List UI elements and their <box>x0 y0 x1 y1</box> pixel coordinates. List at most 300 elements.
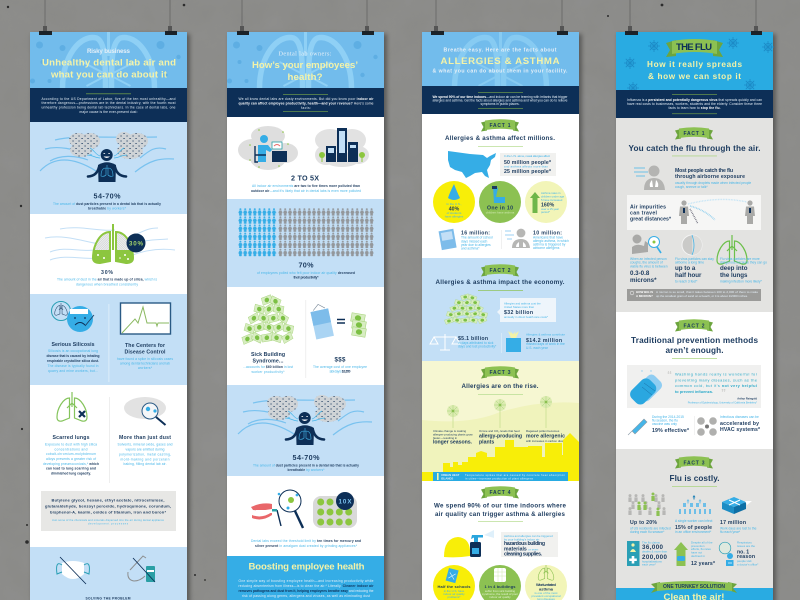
callout: how big is a micron <box>627 289 761 301</box>
stat circle: 160%: Asthma rates in <box>541 191 561 195</box>
stat circle: 160%: 160% <box>541 202 555 208</box>
stat: 16 million school days: days missed each <box>461 240 488 244</box>
panel: fact 3 flu is costly: A single worker can infect <box>675 519 712 523</box>
poster 2: employee health <box>227 26 387 600</box>
panel: fact 3 allergies on the rise: plants <box>479 440 494 446</box>
callout: $32 billion: Allergies and asthma cost the <box>504 302 541 306</box>
panel: fact 3 flu is costly: have not <box>691 550 702 554</box>
header panel <box>30 30 187 88</box>
callout: triggers: hazardous building <box>504 541 545 547</box>
panel: 30% silica lungs: 30% <box>101 270 113 276</box>
panel: fact 3 allergies on the rise: Ragweed pollen becomes <box>526 429 560 433</box>
panel: fact 3 flu is costly: deaths & more than <box>642 550 668 554</box>
header panel: How it really spreads <box>647 60 742 69</box>
stat circle: 40%: have allergies <box>445 214 464 218</box>
panel: fact 1 catch through the air <box>616 118 773 312</box>
icon: magnifier over dust cloud <box>124 397 166 425</box>
panel: fact 3 flu is costly: declined in <box>691 554 705 558</box>
icon: wind and person <box>634 166 665 190</box>
panel: fact 1 catch through the air: through airborne exposure <box>675 174 745 180</box>
binder clips <box>431 26 568 35</box>
callout: millions affected: and asthma affects more than <box>504 164 548 168</box>
stat: 10 million allergic asthma: 10 million: <box>533 230 562 236</box>
panel: fact 2 traditional prevention: aren’t enough. <box>666 346 724 355</box>
callout: $32 billion: United States more than <box>504 305 535 309</box>
callout: triggers: cleaning supplies. <box>504 552 543 558</box>
callout: air impurities travel <box>627 195 761 230</box>
icon: 10X particle cloud: 10X <box>338 498 352 506</box>
panel: scarred lungs and chemicals: cobalt-chromium-molybdenum <box>46 452 96 456</box>
callout: millions affected: 25 million people* <box>504 169 552 175</box>
icon: green lungs <box>717 235 747 264</box>
panel: serious silicosis and CDC: respirable crystalline silica dust. <box>47 359 99 363</box>
callout: triggers <box>501 532 558 558</box>
panel: scarred lungs and chemicals: Scarred lungs <box>52 435 90 441</box>
stat circle: 40% <box>433 181 475 223</box>
intro navy panel: major cause is the ever-present dust: <box>80 110 138 114</box>
callout: triggers: Asthma and allergies can be triggered <box>504 534 553 538</box>
fact 1 ribbon <box>675 127 713 140</box>
fact 2 ribbon: FACT 2 <box>684 324 705 330</box>
panel: fact 3 allergies on the rise: longer seasons. <box>433 440 473 446</box>
panel: fact 1 catch through the air: Flu virus particles are more <box>720 257 760 261</box>
panel: fact 3 flu is costly: flu each year* <box>720 530 741 534</box>
stat circle: 160% <box>525 181 567 223</box>
panel: fact 3 allergies on the rise: Ozone and CO₂ levels that feed <box>479 429 520 433</box>
intro navy panel: quality can affect employee productivity, health—and your revenue? Here’s some <box>238 102 374 106</box>
panel: one turnkey solution <box>616 581 773 600</box>
panel: scarred lungs and chemicals: More than just dust <box>119 435 171 441</box>
panel: fact 3 allergies on the rise: Climate change is making <box>433 429 466 433</box>
panel: fact 2 economy: in days attributed to sick <box>458 341 494 345</box>
binder clips <box>39 26 177 35</box>
fact 1 ribbon: FACT 1 <box>490 123 511 129</box>
icon: washing hands <box>628 370 664 407</box>
fact 2 ribbon: FACT 2 <box>490 268 511 274</box>
panel: fact 2 traditional prevention <box>616 312 773 449</box>
panel: serious silicosis and CDC <box>30 294 187 385</box>
stat: 10 million allergic asthma: asthma is triggered by <box>533 242 566 246</box>
icon: pile of money <box>444 294 488 324</box>
fact 1 ribbon: FACT 1 <box>684 131 705 137</box>
intro navy panel: allergies and asthma. Get the facts about allergies and asthma and what you can do to relieve <box>432 98 568 102</box>
panel: sick building syndrome cost <box>227 287 384 385</box>
panel: scarred lungs and chemicals: alloys presents a greater risk of <box>46 457 96 461</box>
panel: scarred lungs and chemicals <box>30 385 187 547</box>
panel: sick building syndrome cost: Syndrome... <box>252 358 284 364</box>
panel: breathable dust repeat: 54-70% <box>292 453 320 462</box>
panel: breathable dust 54-70%: 54-70% <box>94 192 121 200</box>
poster 4: the flu <box>616 26 776 600</box>
stat circle: 160%: over a 15-year <box>541 207 559 211</box>
stat circle: half the schools <box>433 565 475 600</box>
panel: sick building syndrome cost: Sick Building <box>251 352 285 358</box>
callout: chemical list <box>41 491 176 531</box>
panel: scarred lungs and chemicals: Exposure to dust with high silica <box>45 442 97 446</box>
panel: fact 1 catch through the air: microns* <box>630 277 657 284</box>
quote box: to prevent influenza. <box>675 389 713 394</box>
icon: US map <box>448 151 496 178</box>
panel: 2 to 5X pollution: outdoor air—and it’s likely that air in dental labs is even more polluted <box>251 189 361 193</box>
header panel: & how we can stop it <box>648 72 741 81</box>
callout: how big is a micron: A micron is so small, that it takes between 100 to 2,000 of them to make <box>656 290 758 294</box>
header panel: Dental lab owners: <box>278 50 332 58</box>
panel: fact 3 flu is costly: reason <box>737 554 755 560</box>
panel: fact 4 indoors: We spend 90% of our time indoors where <box>434 502 567 510</box>
panel: fact 3 flu is costly: Flu is costly. <box>670 474 720 483</box>
icon: city buildings in polluted cloud <box>315 128 369 167</box>
panel: fact 3 flu is costly: Work days are lost to the <box>720 526 757 530</box>
intro navy panel <box>30 88 187 122</box>
icon: tissue box <box>506 331 521 352</box>
panel: serious silicosis and CDC: Serious Silicosis <box>52 342 95 348</box>
panel: breathable dust repeat: The amount of dust particles present in a dental lab that is actually <box>253 464 359 468</box>
panel: breathable dust repeat <box>227 385 384 476</box>
stat circle: work-related asthma: asthma <box>539 586 554 592</box>
panel: fact 3 flu is costly: 36,000 <box>642 544 664 551</box>
panel: boosting employee health: risk of passing along germs, allergens and viruses, as well as eliminating dust <box>242 594 370 598</box>
callout: millions affected: In the U.S. alone, nasal allergies affect <box>504 154 550 158</box>
panel: sick building syndrome cost: The average cost of one employee <box>313 365 367 369</box>
panel: fact 2 economy: $5.1 billion <box>458 336 488 342</box>
panel: fact 1 catch through the air: making infection more likely* <box>720 280 762 284</box>
panel: scarred lungs and chemicals: polymerization, metal casting, <box>119 452 171 456</box>
callout: how big is a micron: HOW BIG IS <box>636 290 653 294</box>
title ribbon: THE FLU <box>676 42 712 53</box>
panel: fact 1 catch through the air: up to a <box>675 265 696 272</box>
panel: scarred lungs and chemicals: concentrations and <box>54 448 88 452</box>
panel: serious silicosis and CDC: The Centers for <box>125 343 165 349</box>
header panel: what you can do about it <box>50 70 168 80</box>
panel: 70% productivity pictogram <box>227 199 384 287</box>
stat: 10 million allergic asthma: allergic asthma, in which <box>533 239 569 243</box>
panel: fact 3 flu is costly: Up to 20% <box>630 520 657 526</box>
panel: fact 1 catch through the air: cough, sneeze or talk* <box>675 185 708 189</box>
stat: 10 million allergic asthma: Americans that have <box>533 236 563 240</box>
icon: 10X particle cloud <box>313 492 357 528</box>
callout: urban heat islands: URBAN HEAT <box>441 473 460 477</box>
panel: fact 3 flu is costly: efforts, flu rates <box>691 547 711 551</box>
icon: pile of money <box>242 295 294 344</box>
panel: fact 3 flu is costly: prevention <box>691 544 705 548</box>
panel: serious silicosis and CDC: have found a spike in silicosis cases <box>117 357 173 361</box>
panel: fact 1 catch through the air: viable flu virus is between <box>630 264 668 268</box>
panel: 70% productivity pictogram: of employees polled who felt poor indoor air quality decreased <box>257 271 355 275</box>
poster 3: allergies and asthma <box>422 26 582 600</box>
stat circle: 160%: children under age <box>541 194 565 198</box>
panel: fact 3 flu is costly: of US residents are infected <box>630 526 671 530</box>
intro navy panel: symptoms in public places. <box>480 102 520 106</box>
icon: office pyramid <box>679 495 711 514</box>
panel: fact 2 traditional prevention: HVAC systems* <box>720 427 761 433</box>
stat circle: work-related asthma: Work-related <box>536 582 557 587</box>
title ribbon <box>666 39 723 57</box>
fact 3 ribbon <box>481 366 519 378</box>
header panel: ALLERGIES & ASTHMA <box>440 56 560 67</box>
panel: fact 3 flu is costly: during each flu season* <box>630 530 665 534</box>
quote box: ” <box>721 388 726 399</box>
panel: 30% silica lungs: The amount of dust in the air that is made up of silica, which is <box>57 278 157 282</box>
intro navy panel: We all know dental labs are dusty environments. But did you know poor indoor air <box>238 97 374 101</box>
fact 3 ribbon <box>675 456 713 468</box>
panel: breathable dust repeat: breathable by workers* <box>288 468 325 472</box>
stat circle: 1 in 4 buildings: syndrome, the result of poor <box>482 592 518 596</box>
icon: HVAC fan <box>697 417 717 436</box>
fact 4 ribbon: FACT 4 <box>490 490 511 496</box>
icon: worker at desk in polluted cloud <box>238 126 298 170</box>
icon: dentures and magnifier <box>251 490 303 528</box>
binder clips <box>625 26 762 35</box>
stat circle: 1 in 4 buildings: 1 in 4 buildings <box>484 584 516 589</box>
panel: serious silicosis and CDC: disease that is caused by inhaling <box>46 354 100 358</box>
panel: fact 2 economy: U.S. each year <box>526 346 549 350</box>
panel: 30% silica lungs <box>30 214 187 294</box>
panel: boosting employee health: removes pathogens and dust from it, helping employees breathe easy and reducing the <box>238 589 374 593</box>
fact 3 ribbon: FACT 3 <box>684 460 705 466</box>
stat circle: one in 10 <box>479 181 521 223</box>
panel: fact 3 flu is costly: Respiratory <box>737 540 752 544</box>
panel: fact 1 catch through the air: dangerous because they can go <box>720 260 767 264</box>
panel: sick building syndrome cost: worker productivity* <box>252 370 285 374</box>
intro navy panel: have real costs to businesses, workers, students and the elderly. Consider these three <box>627 102 762 106</box>
icon: scales <box>430 334 460 350</box>
icon: scarred lungs <box>57 392 87 421</box>
panel: fact 1 catch through the air: You catch the flu through the air. <box>628 144 760 153</box>
panel: fact 2 economy: Allergies & asthma contribute <box>526 332 565 336</box>
stat circle: work-related asthma <box>525 565 567 600</box>
panel: fact 3 flu is costly: Despite all of the <box>691 540 713 544</box>
panel: fact 3 allergies on the rise: Allergies are on the rise. <box>462 383 539 390</box>
panel: 2 to 5X pollution <box>227 117 384 199</box>
stat: 10 million allergic asthma <box>505 229 569 250</box>
icon: half-hour clock <box>682 235 702 255</box>
panel: fact 3 flu is costly: hospitalizations <box>642 560 662 564</box>
callout: chemical list: bisphenol-A, kaolin, oxides of titanium, iron and boron* <box>50 510 166 514</box>
callout: $32 billion <box>497 298 556 322</box>
icon: hard hat and spray bottle <box>444 530 494 557</box>
panel: serious silicosis and CDC: The disease is typically found in <box>48 364 99 368</box>
callout: urban heat islands: Temperature spikes that are caused by concrete heat absorption <box>465 473 566 477</box>
panel: sick building syndrome cost: $$$ <box>334 356 346 364</box>
header panel <box>422 30 579 88</box>
intro navy panel: therefore dangerous—professions are in the dental industry, with the fourth most <box>42 101 176 105</box>
solution ribbon <box>651 581 737 593</box>
panel: fact 2 traditional prevention: Traditional prevention methods <box>631 336 758 345</box>
panel: scarred lungs and chemicals: can lead to lung scarring and <box>46 466 96 470</box>
panel: fact 1 catch through the air: half hour <box>675 272 702 279</box>
header panel: Risky business <box>87 48 131 55</box>
intro navy panel: unhealthy profession being dental lab technicians. In the case of dental labs, one <box>42 106 176 110</box>
panel: fact 3 flu is costly: in an office environment* <box>675 530 712 534</box>
stat circle: half the schools: problems* <box>447 595 461 599</box>
callout: triggers: by your building's indoor air: <box>504 538 540 542</box>
icon: coughing person and magnifier <box>632 234 661 254</box>
stat: 10 million allergic asthma: airborne allergens <box>533 246 560 250</box>
panel: 2 to 5X pollution: All indoor air environments are two to five times more polluted than <box>252 184 360 188</box>
callout: urban heat islands: in cities—increase production of plant allergens <box>465 476 534 480</box>
stat circle: 1 in 4 buildings <box>479 565 521 600</box>
panel: fact 2 traditional prevention: flu season, the flu <box>652 418 678 422</box>
icon: stack of sick days <box>722 497 752 514</box>
quote box: preventing many diseases, such as the <box>675 378 757 382</box>
icon: sick day sheet equals money <box>309 303 366 340</box>
quote box: Arthur Reingold <box>737 396 757 400</box>
icon: sick face with lungs <box>52 302 94 332</box>
panel: fact 1 catch through the air: airborne a long time <box>675 260 704 264</box>
panel: boosting employee health: Boosting employee health <box>248 562 365 572</box>
header panel: Breathe easy. Here are the facts about <box>444 48 557 54</box>
stat circle: half the schools: indoor air quality <box>443 592 465 596</box>
panel: serious silicosis and CDC: among dental technicians and lab <box>120 362 170 366</box>
panel: 70% productivity pictogram: 70% <box>298 260 314 270</box>
intro navy panel: facts: <box>301 106 311 110</box>
panel: fact 1 allergies affect millions: Allergies & asthma affect millions. <box>445 135 555 142</box>
panel: fact 3 allergies on the rise: more allergenic <box>526 434 565 440</box>
panel: sick building syndrome cost: ...accounts for $60 billion in lost <box>243 365 293 369</box>
panel: breathable dust 54-70%: The amount of dust particles present in a dental lab that is actually <box>53 202 161 206</box>
panel: serious silicosis and CDC: quarry and mine workers, but... <box>48 369 98 373</box>
panel: fact 4 indoors: air quality can trigger asthma & allergies <box>435 511 566 518</box>
header panel <box>616 32 774 94</box>
callout: urban heat islands <box>433 472 568 481</box>
skyline <box>422 433 579 481</box>
panel: fact 2 economy: $14.2 million <box>526 338 562 344</box>
intro navy panel <box>422 86 579 114</box>
fact 1 ribbon <box>481 119 519 132</box>
icon: crossed out mask <box>57 557 89 584</box>
panel: scarred lungs and chemicals: mold-making and porcelain <box>120 458 170 462</box>
panel: boosting employee health: reducing absenteeism from illness—is to clean the air.* Literally. Cleaner indoor air <box>238 584 374 588</box>
panel: fact 3 flu is costly <box>616 449 773 588</box>
panel: mercury and silver threshold <box>227 476 384 556</box>
panel: fact 1 allergies affect millions <box>422 114 579 258</box>
panel: scarred lungs and chemicals: baking, filling dental lab air. <box>124 462 167 466</box>
panel: boosting employee health: One simple way of boosting employee health—and increasing productivity while <box>238 579 374 583</box>
stat: 16 million school days <box>439 229 493 250</box>
panel: 2 to 5X pollution: 2 TO 5X <box>291 174 319 182</box>
panel: fact 1 catch through the air: usually through droplets made when infected people <box>675 181 751 185</box>
panel: fact 3 allergies on the rise: with increases in carbon dioxide <box>526 439 567 443</box>
quote box: “ <box>667 370 672 381</box>
panel: fact 4 indoors <box>422 481 579 600</box>
callout: air impurities travel: can travel <box>630 210 658 216</box>
icon: crowd with infected people <box>628 492 666 516</box>
callout: chemical list: Butylene glycol, hexane, ethyl acetate, nitrocellulose, <box>52 498 164 502</box>
panel: fact 3 flu is costly: a doctor’s office* <box>737 562 759 566</box>
callout: $32 billion: $32 billion <box>504 310 533 316</box>
quote box: common cold, but it’s not very helpful <box>675 383 757 388</box>
fact 2 ribbon <box>675 319 713 332</box>
panel: fact 1 catch through the air: deep into <box>720 265 748 272</box>
panel: fact 3 flu is costly: 200,000 <box>642 554 668 561</box>
fact 2 ribbon <box>481 264 519 276</box>
panel: fact 3 allergies on the rise: allergy-producing <box>479 434 522 440</box>
stat circle: 1 in 4 buildings: indoor air quality <box>489 595 511 599</box>
stat: 16 million school days: 16 million: <box>461 230 490 236</box>
callout: chemical list: development processes <box>88 522 129 526</box>
header panel: & what you can do about them in your facility. <box>432 68 568 74</box>
panel: solving the problem <box>30 547 187 600</box>
panel: fact 3 flu is costly: no. 1 <box>737 550 749 556</box>
panel: fact 2 traditional prevention: vaccine was only <box>652 422 677 426</box>
panel: breathable dust 54-70%: breathable by workers* <box>88 206 127 210</box>
intro navy panel: Influenza is a persistent and potentially dangerous virus that spreads quickly and can <box>627 98 762 102</box>
panel: fact 1 catch through the air: to reach 3 feet* <box>675 280 698 284</box>
callout: how big is a micron: A MICRON? <box>636 294 653 298</box>
callout: chemical list: glutaraldehyde, benzoyl peroxide, hydroquinone, corundum, <box>45 504 171 508</box>
panel: fact 2 traditional prevention: 19% effective* <box>652 428 690 434</box>
panel: fact 2 traditional prevention: During the 2014-2015 <box>652 415 684 419</box>
stat circle: 40%: of students <box>447 211 462 215</box>
quote box: Washing hands really is wonderful for <box>675 372 758 376</box>
stat circle: half the schools: in the U.S. have <box>444 589 465 593</box>
dandelions <box>447 396 552 428</box>
panel: fact 3 flu is costly: issues are the <box>737 544 755 548</box>
panel: scarred lungs and chemicals: vapors are emitted during <box>126 448 165 452</box>
callout: millions affected <box>500 153 556 176</box>
stat: 16 million school days: and asthma* <box>461 246 480 250</box>
callout: air impurities travel: Air impurities <box>630 204 666 210</box>
stat circle: 40%: 40% <box>449 206 460 212</box>
panel: fact 2 economy: days and lost productivity* <box>458 344 497 348</box>
callout: air impurities travel: great distances* <box>630 216 672 222</box>
panel: fact 3 flu is costly: 17 million <box>720 520 746 526</box>
panel: fact 3 flu is costly: each year* <box>642 562 657 566</box>
binder clips <box>237 26 374 35</box>
panel: mercury and silver threshold: Dental labs exceed the threshold limit by ten times for mercury and <box>251 539 361 543</box>
callout: chemical list: Just some of the chemicals and minerals dispersed into the air during dental appliance <box>52 518 165 522</box>
panel: fact 3 allergies on the rise <box>422 361 579 481</box>
icon: green house with mask <box>674 542 688 566</box>
panel: serious silicosis and CDC: workers* <box>138 366 153 370</box>
header panel <box>227 30 384 88</box>
panel: fact 2 economy: missed days of work in the <box>526 342 565 346</box>
panel: serious silicosis and CDC: Disease Control <box>124 350 166 356</box>
panel: breathable dust 54-70% <box>30 122 187 214</box>
panel: 30% silica lungs: dangerous when breathed consistently <box>76 282 138 286</box>
panel: fact 1 catch through the air: When an infected person <box>630 257 667 261</box>
panel: fact 3 flu is costly: people visit <box>737 559 752 563</box>
callout: how big is a micron: up the smallest grain of sand on a beach, or it is about 1/2000 inches. <box>656 294 748 298</box>
intro navy panel: facts to learn how to stop the flu. <box>668 106 721 110</box>
header panel: Unhealthy dental lab air and <box>42 58 176 68</box>
callout: millions affected: 50 million people* <box>504 160 552 166</box>
panel: serious silicosis and CDC: Silicosis is an occupational lung <box>48 349 98 353</box>
panel: fact 1 catch through the air: 0.3-0.8 <box>630 270 650 277</box>
panel: fact 1 catch through the air: coughs, the amount of <box>630 260 663 264</box>
stat circle: 160%: 5 have increased <box>541 198 563 202</box>
intro navy panel: We spend 90% of our time indoors—and indoor air can be teeming with irritants that trigger <box>432 95 568 99</box>
icon: hospital card <box>627 541 640 566</box>
chart: silicosis spike <box>120 303 170 334</box>
header panel: How’s your employees’ <box>252 60 358 71</box>
panel: fact 2 economy: Allergies & asthma impact the economy. <box>436 279 565 286</box>
intro navy panel: According to the US Department of Labor, five of the ten most unhealthy—and <box>42 97 176 101</box>
stat circle: 40%: In the U.S., <box>446 202 462 206</box>
stat circle: work-related asthma: prevalent occupational <box>532 594 561 598</box>
panel: fact 2 traditional prevention: Infectious diseases can be <box>720 415 759 419</box>
panel: fact 3 flu is costly: The flu claims <box>642 540 660 544</box>
quote box: Professor of Epidemiology, University of California Berkeley* <box>688 400 757 404</box>
panel: fact 3 flu is costly: 15% of people <box>675 525 712 531</box>
poster 1: unhealthy dental lab air <box>30 26 190 600</box>
panel: fact 2 economy <box>422 258 579 361</box>
stat: 16 million school days: year due to allergies <box>461 243 491 247</box>
panel: 70% productivity pictogram: their productivity* <box>294 276 319 280</box>
fact 4 ribbon <box>481 486 519 498</box>
intro navy panel <box>227 88 384 117</box>
panel: boosting employee health <box>227 556 384 600</box>
